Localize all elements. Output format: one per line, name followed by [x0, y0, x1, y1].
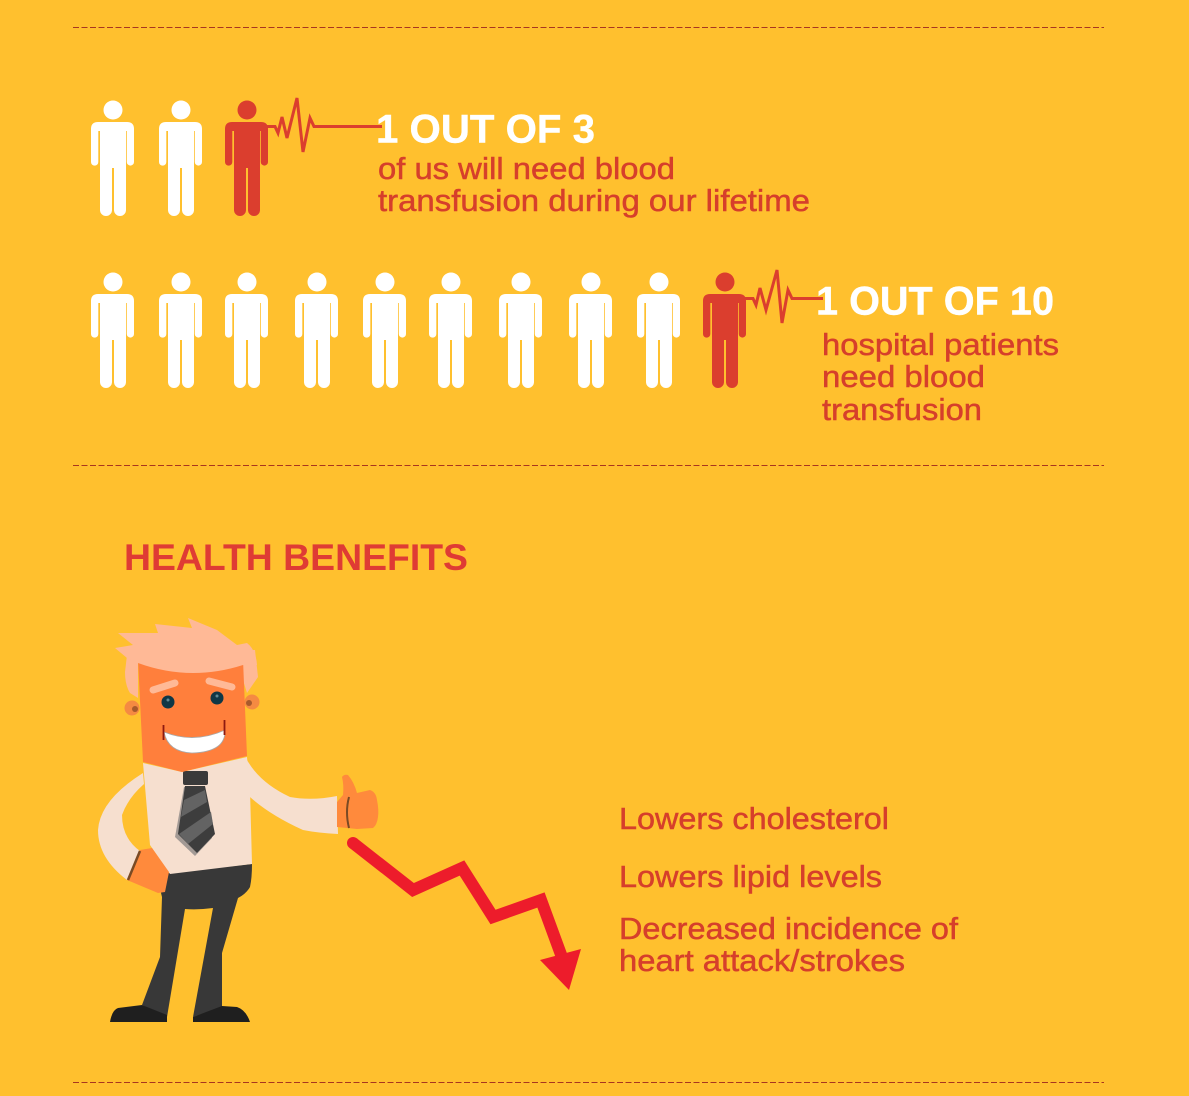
ears [124, 700, 140, 716]
stat description 1 [378, 151, 810, 218]
heading: health benefits: HEALTH BENEFITS [124, 537, 468, 578]
red downward arrow [347, 837, 581, 990]
front hand [127, 848, 169, 893]
heartbeat line 1 [266, 98, 382, 152]
stat description 1: of us will need blood [378, 151, 675, 186]
person icon: red [225, 100, 268, 216]
row 1: 1 out of 3 people [91, 100, 268, 216]
shirt [143, 757, 252, 874]
hair back [125, 650, 258, 698]
benefit 3: Decreased incidence of [619, 911, 958, 946]
stat description 2: hospital patients [822, 327, 1059, 362]
stat description 2: transfusion [822, 392, 982, 427]
smile [164, 730, 225, 753]
heartbeat line 2 [744, 270, 823, 323]
stat description 1: transfusion during our lifetime [378, 183, 810, 218]
outstretched arm [247, 760, 338, 834]
benefit 2: Lowers lipid levels [619, 859, 882, 894]
person icon: white [159, 100, 202, 216]
eyes [162, 696, 174, 708]
back arm [98, 773, 144, 880]
stat heading: 1 out of 10: 1 OUT OF 10 [816, 280, 1054, 324]
benefits list [619, 801, 958, 978]
tie [175, 771, 215, 856]
stat description 2: need blood [822, 359, 985, 394]
stat heading: 1 out of 3: 1 OUT OF 3 [376, 108, 595, 152]
row 2: 1 out of 10 people [91, 272, 746, 388]
character: man giving thumbs up [98, 618, 378, 1022]
benefit 3 [619, 911, 958, 978]
thumbs up hand [337, 775, 378, 829]
shoes [110, 1005, 250, 1022]
trousers [142, 864, 252, 1017]
eyebrows [153, 683, 175, 690]
person icon: white [91, 100, 134, 216]
stat description 2 [822, 327, 1059, 427]
benefit 3: heart attack/strokes [619, 943, 905, 978]
face [138, 660, 247, 772]
hair [115, 618, 257, 673]
benefit 1: Lowers cholesterol [619, 801, 889, 836]
